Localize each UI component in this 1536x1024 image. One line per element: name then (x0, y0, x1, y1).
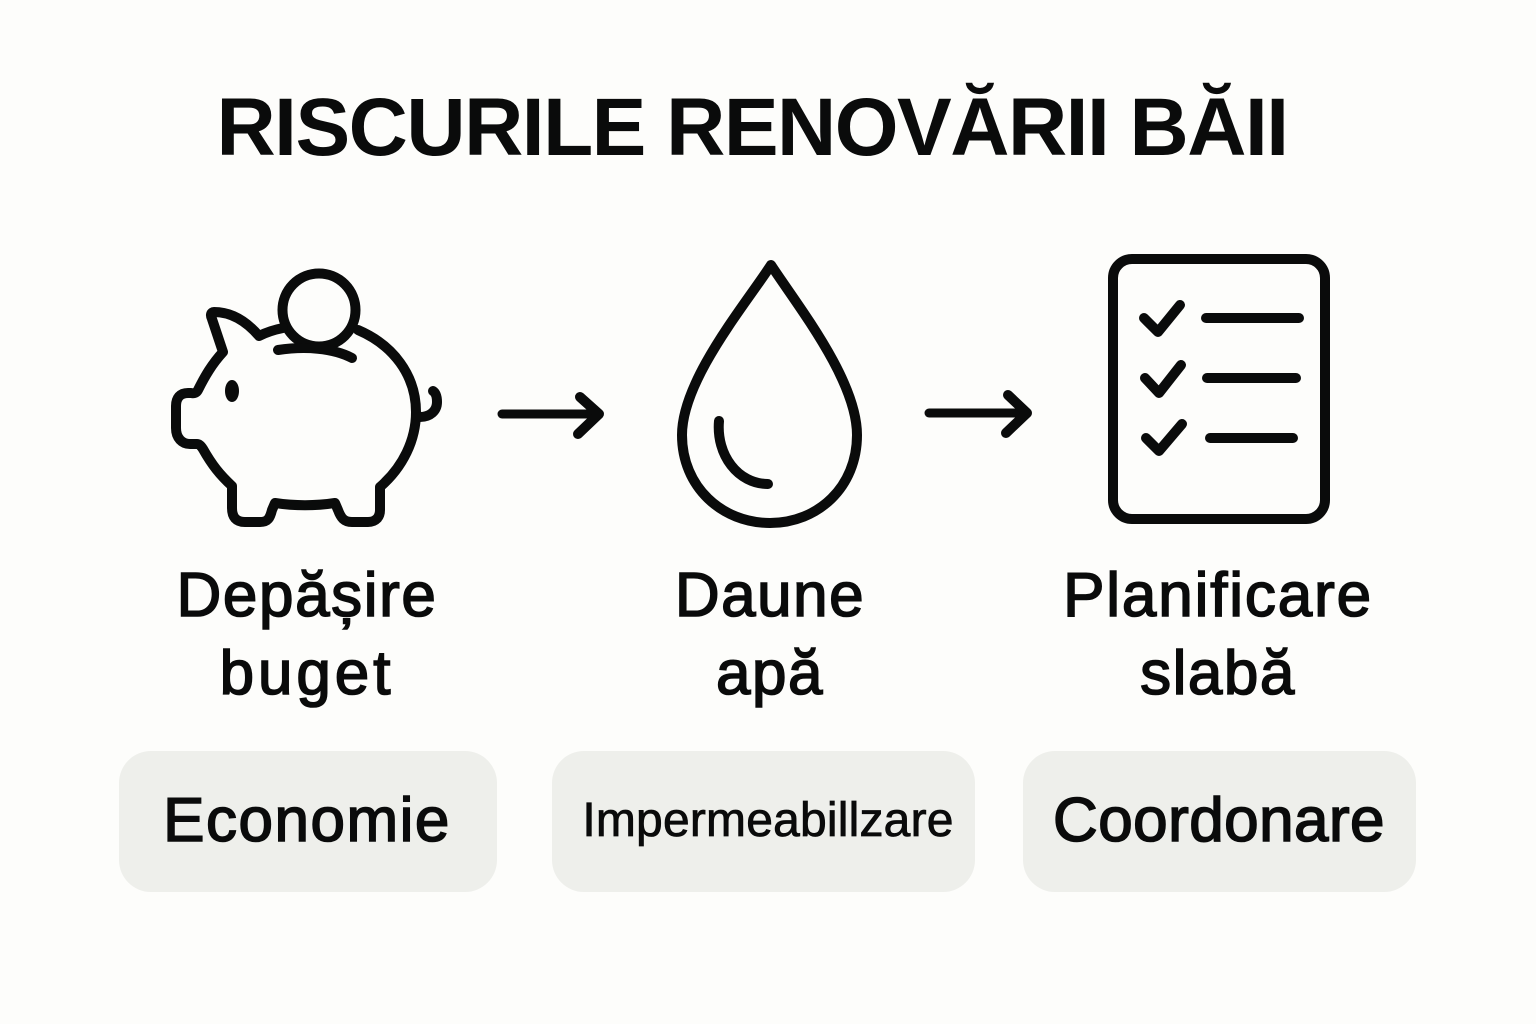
label: water damage: Daune (675, 561, 865, 630)
pill text: waterproofing: Impermeabillzare (582, 794, 954, 847)
icon: piggy bank with coin (176, 274, 437, 522)
label: budget overrun (177, 561, 437, 708)
icon: checklist (1113, 259, 1325, 519)
label: poor planning: slabă (1140, 639, 1296, 708)
label: water damage: apă (716, 639, 824, 708)
pill text: economy: Economie (163, 786, 451, 855)
icon: water drop (682, 265, 857, 523)
label: budget overrun: Depășire (177, 561, 437, 630)
label: poor planning: Planificare (1063, 561, 1373, 630)
title: RISCURILE RENOVĂRII BĂII (216, 82, 1288, 173)
label: budget overrun: buget (220, 639, 394, 708)
arrow 2 (929, 395, 1027, 433)
pill text: coordination: Coordonare (1053, 786, 1385, 855)
arrow 1 (502, 397, 599, 434)
label: water damage (675, 561, 865, 708)
pill: coordination (1023, 751, 1416, 892)
pill: economy (119, 751, 497, 892)
label: poor planning (1063, 561, 1373, 708)
pill: waterproofing (552, 751, 975, 892)
